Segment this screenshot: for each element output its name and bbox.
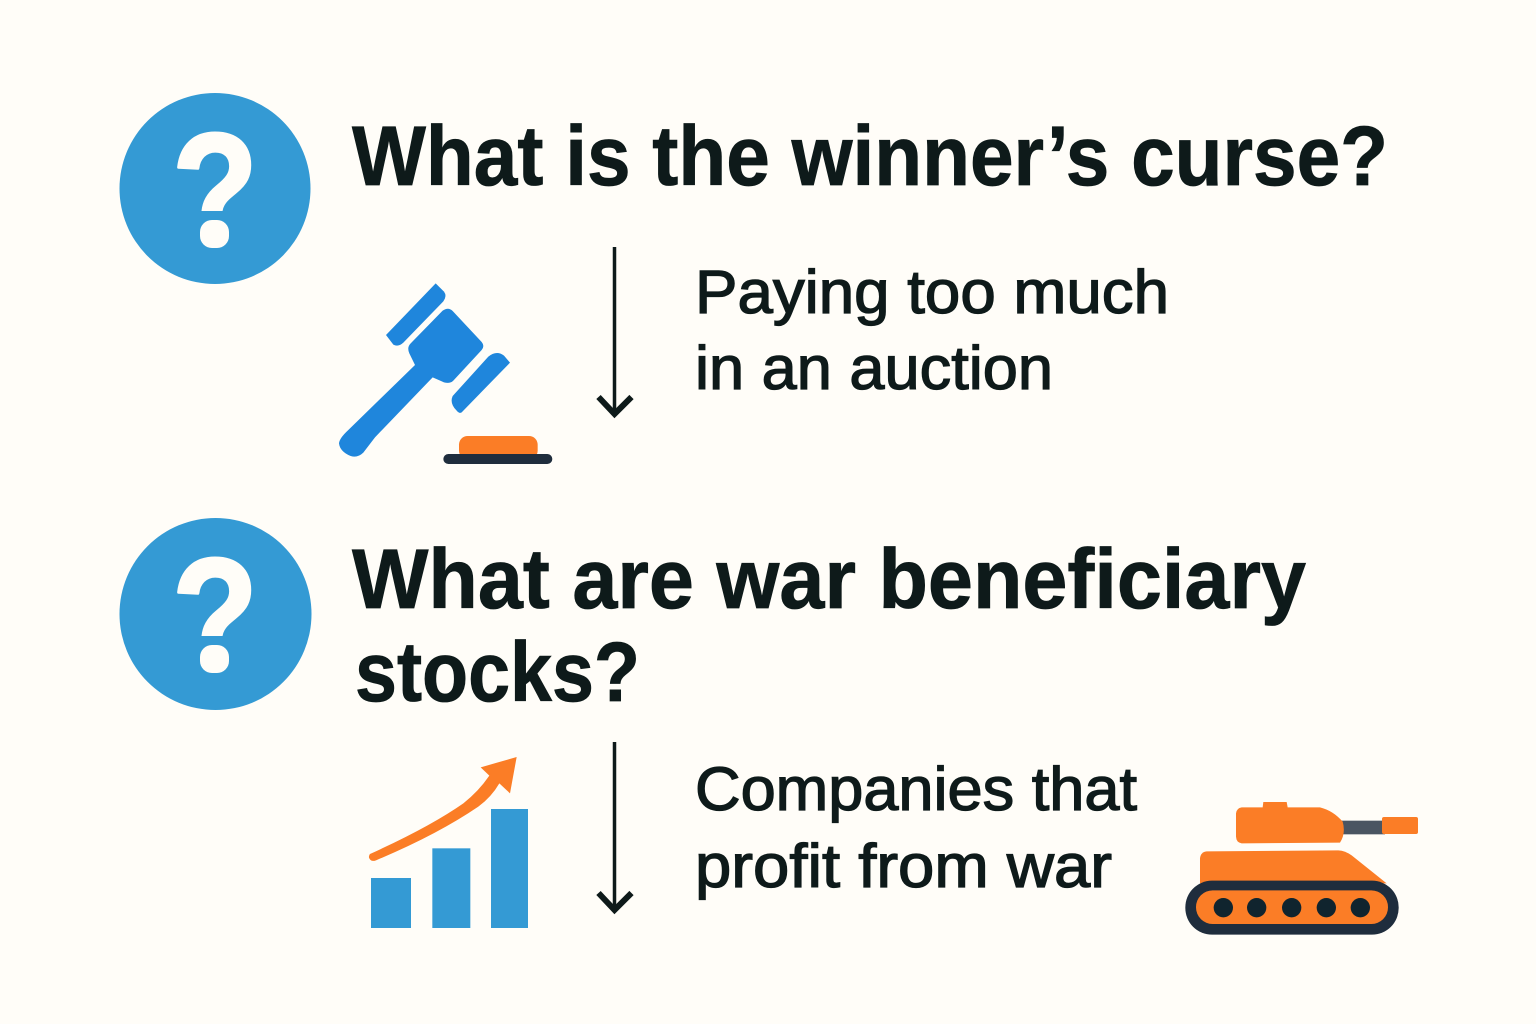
icon: question mark circle 2: ? <box>172 525 258 707</box>
heading: what is the winner's curse: What is the winner’s curse? <box>352 109 1388 203</box>
text: companies that profit from war: Companies that <box>695 755 1137 823</box>
text: companies that profit from war <box>695 755 1137 900</box>
icon: question mark circle 2 <box>120 518 312 710</box>
text: companies that profit from war: profit from war <box>695 832 1112 900</box>
text: paying too much in an auction: Paying too much <box>695 258 1169 326</box>
arrow: down arrow 1 <box>598 247 632 414</box>
icon: auction gavel <box>339 283 552 464</box>
icon: tank <box>1185 802 1418 935</box>
icon: question mark circle 1: ? <box>172 100 258 282</box>
heading: what are war beneficiary stocks <box>352 532 1306 719</box>
heading: what are war beneficiary stocks: What are war beneficiary <box>352 532 1306 626</box>
arrow: down arrow 2 <box>598 742 632 910</box>
heading: what are war beneficiary stocks: stocks? <box>355 625 640 719</box>
icon: question mark circle 1 <box>120 93 310 284</box>
text: paying too much in an auction: in an auction <box>695 334 1053 402</box>
icon: rising bar chart <box>369 757 528 928</box>
text: paying too much in an auction <box>695 258 1169 402</box>
